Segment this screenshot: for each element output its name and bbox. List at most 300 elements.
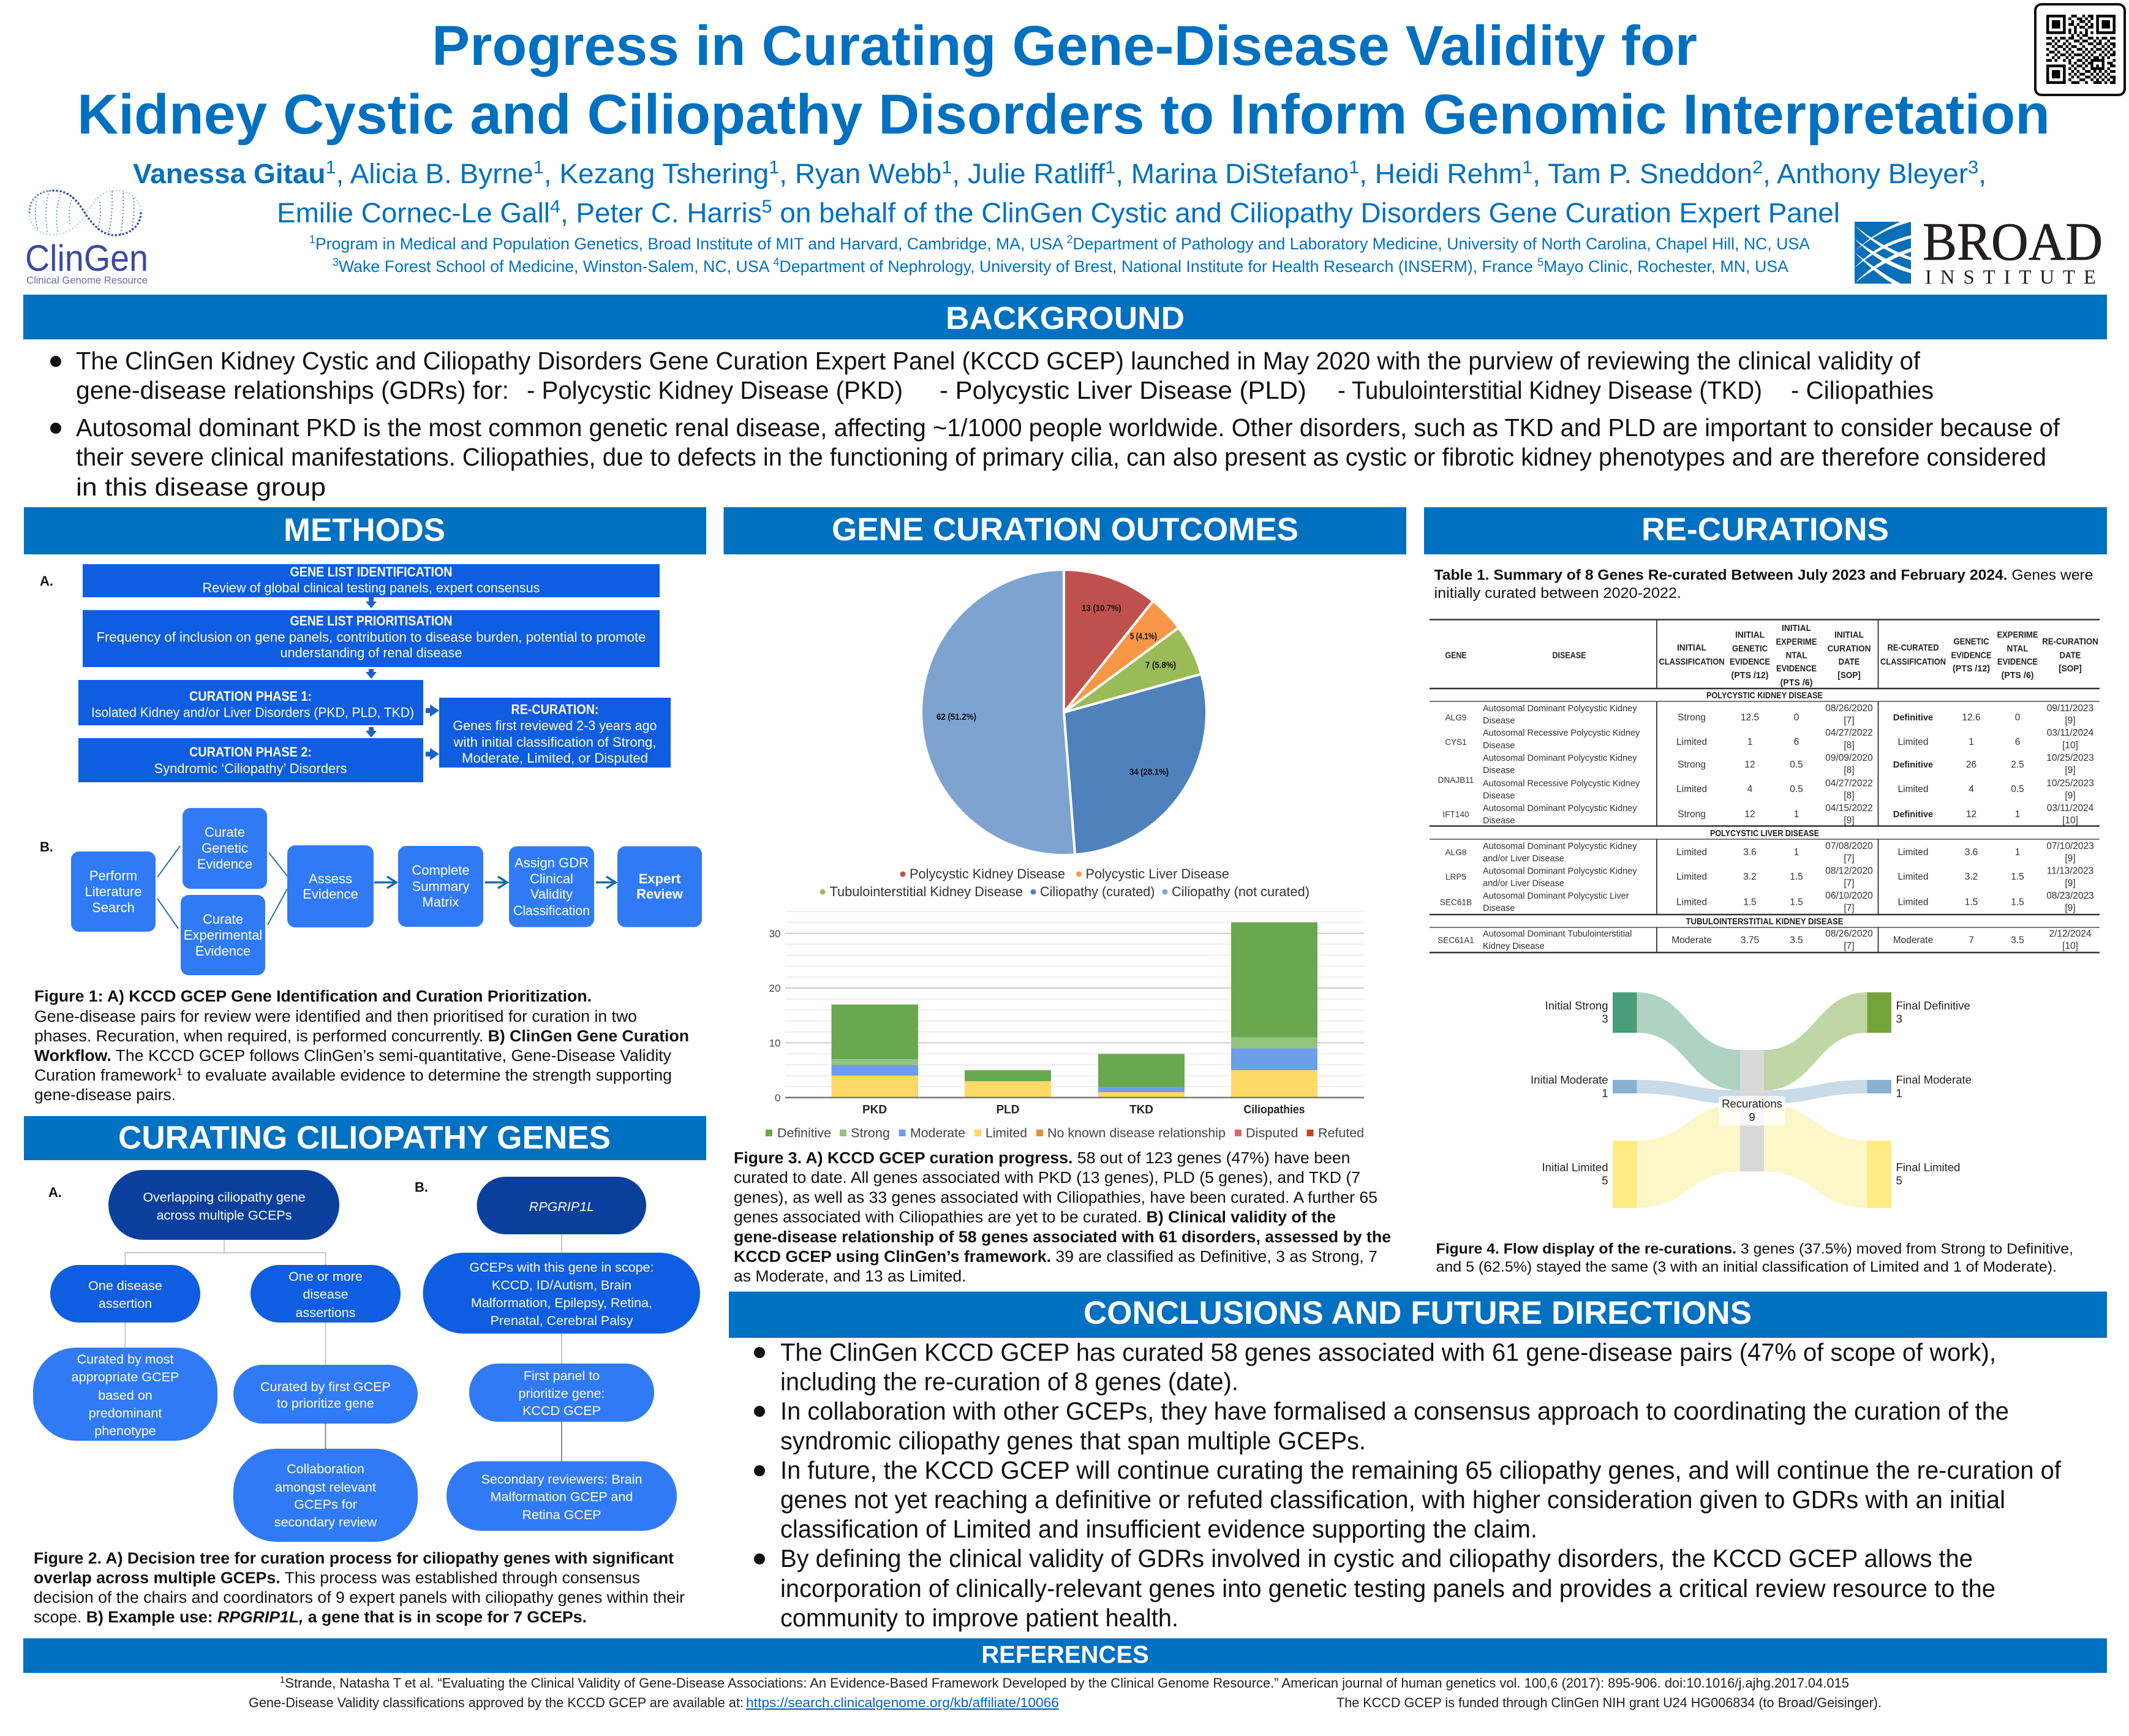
helix icon bbox=[29, 191, 141, 235]
box: assign classification: Classification bbox=[513, 903, 590, 918]
heading: conclusions bbox=[729, 1291, 2107, 1338]
caption: figure 3: as Moderate, and 13 as Limited. bbox=[734, 1268, 967, 1285]
section: polycystic liver disease: 08/23/2023 bbox=[2046, 891, 2094, 901]
table header: INITIAL bbox=[1782, 623, 1811, 633]
section: polycystic liver disease: ALG8 bbox=[1445, 848, 1466, 857]
section: polycystic kidney disease: Definitive bbox=[1893, 713, 1933, 723]
section: polycystic kidney disease: 12 bbox=[1966, 809, 1976, 820]
pill: one disease assertion: assertion bbox=[99, 1296, 152, 1311]
box: gene list identification: GENE LIST IDENTIFICATION bbox=[290, 564, 452, 579]
caption: figure 2 bbox=[34, 1550, 685, 1626]
broad icon bbox=[1855, 222, 1911, 284]
node labels: Final Limited bbox=[1896, 1161, 1960, 1174]
pie legend: Polycystic Kidney Disease bbox=[910, 866, 1065, 881]
text block: background bullets: - Polycystic Liver Disease (PLD) bbox=[940, 376, 1306, 404]
pill: one or more disease assertions: assertions bbox=[295, 1305, 355, 1320]
flowchart A: gene prioritisation bbox=[40, 564, 671, 782]
table header: NTAL bbox=[2007, 643, 2029, 654]
table header: (PTS /12) bbox=[1953, 663, 1990, 674]
box: curate experimental evidence: Curate bbox=[203, 911, 243, 927]
section: polycystic kidney disease: 6 bbox=[2015, 737, 2020, 747]
text block: background bullets bbox=[50, 347, 2060, 501]
caption: figure 3: gene-disease relationship of 58 genes associated with 61 disorders, assessed by the bbox=[734, 1229, 1391, 1246]
pill: secondary reviewers: Malformation GCEP and bbox=[491, 1490, 633, 1504]
connector lines bbox=[125, 1240, 326, 1365]
table header: (PTS /12) bbox=[1731, 670, 1769, 681]
section: polycystic liver disease: Limited bbox=[1676, 847, 1707, 858]
pill: curated by first GCEP: Curated by first GCEP bbox=[260, 1379, 391, 1394]
section: tubulointerstitial kidney disease: Moderate bbox=[1671, 935, 1712, 946]
pill: curated by most appropriate GCEP: predominant bbox=[89, 1406, 162, 1421]
decision tree A bbox=[33, 1170, 418, 1542]
box: gene list identification: Review of global clinical testing panels, expert consensus bbox=[202, 580, 540, 595]
caption: figure 1: gene-disease pairs. bbox=[34, 1087, 176, 1104]
pill: overlapping ciliopathy gene bbox=[108, 1170, 339, 1240]
section: polycystic liver disease: [7] bbox=[1844, 903, 1855, 913]
caption: figure 4: and 5 (62.5%) stayed the same (3 with an initial classification of Limited and 1 of Moderate). bbox=[1436, 1259, 2057, 1275]
section: polycystic liver disease: [9] bbox=[2065, 903, 2076, 913]
pill: RPGRIP1L bbox=[477, 1177, 646, 1234]
section: polycystic kidney disease: 12.6 bbox=[1962, 712, 1981, 723]
bar legend: Definitive bbox=[777, 1126, 831, 1141]
flowchart B: curation workflow bbox=[40, 808, 702, 975]
section: polycystic kidney disease: Limited bbox=[1676, 784, 1707, 794]
box: perform literature search: Search bbox=[92, 900, 135, 915]
node labels: 1 bbox=[1602, 1087, 1608, 1100]
section: polycystic kidney disease: [7] bbox=[1844, 715, 1855, 726]
bar chart bbox=[769, 911, 1364, 1116]
text block: references: https://search.clinicalgenome.org/kb/affiliate/10066 bbox=[746, 1695, 1059, 1710]
section: polycystic liver disease: 1 bbox=[2015, 847, 2020, 858]
section: polycystic liver disease: 06/10/2020 bbox=[1825, 891, 1873, 901]
center label: recurations bbox=[1719, 1096, 1785, 1126]
section: polycystic kidney disease: 0.5 bbox=[1790, 784, 1803, 794]
pill: curated by first GCEP bbox=[233, 1365, 418, 1424]
bar chart: 0 bbox=[775, 1092, 780, 1104]
pill: one or more disease assertions: disease bbox=[303, 1287, 349, 1302]
box: curate genetic evidence: Evidence bbox=[197, 856, 252, 872]
caption: table 1: Table 1. Summary of 8 Genes Re-curated Between July 2023 and February 2024. Genes were bbox=[1434, 567, 2093, 583]
panel: gene curation outcomes bbox=[724, 507, 1406, 1285]
text block: background bullets: - Polycystic Kidney Disease (PKD) bbox=[527, 376, 903, 404]
pill: secondary reviewers: Retina GCEP bbox=[522, 1508, 601, 1522]
section: polycystic kidney disease: Disease bbox=[1483, 716, 1515, 726]
section: polycystic kidney disease: 04/27/2022 bbox=[1825, 728, 1873, 738]
table: re-curated genes bbox=[1430, 620, 2100, 953]
box: assess evidence: Evidence bbox=[303, 886, 358, 902]
section: polycystic liver disease: Autosomal Dominant Polycystic Liver bbox=[1483, 891, 1629, 901]
caption: figure 3: KCCD GCEP using ClinGen’s framework. 39 are classified as Definitive, 3 as Strong, 7 bbox=[734, 1248, 1377, 1266]
section: polycystic kidney disease: 6 bbox=[1794, 737, 1799, 747]
box: curate genetic evidence: Curate bbox=[205, 825, 245, 840]
pill: curated by most appropriate GCEP: Curated by most bbox=[77, 1352, 173, 1367]
section: polycystic kidney disease: Autosomal Recessive Polycystic Kidney bbox=[1483, 728, 1640, 738]
pill: first panel: First panel to bbox=[524, 1368, 600, 1383]
pill: GCEPs with this gene in scope: KCCD, ID/Autism, Brain bbox=[492, 1278, 631, 1293]
pill: curated by most appropriate GCEP: appropriate GCEP bbox=[72, 1370, 179, 1384]
bar legend: Moderate bbox=[910, 1126, 965, 1141]
bar legend: Refuted bbox=[1318, 1126, 1364, 1141]
bar chart: 20 bbox=[769, 983, 780, 994]
table header: INITIAL bbox=[1834, 630, 1864, 640]
pill: RPGRIP1L: RPGRIP1L bbox=[529, 1199, 594, 1214]
heading: curating ciliopathy genes: CURATING CILIOPATHY GENES bbox=[118, 1120, 611, 1156]
title bbox=[77, 15, 2050, 146]
section: polycystic kidney disease: 4 bbox=[1969, 784, 1974, 794]
section: polycystic kidney disease: [10] bbox=[2062, 740, 2078, 751]
section: polycystic kidney disease: 08/26/2020 bbox=[1825, 703, 1873, 714]
section: polycystic kidney disease: Disease bbox=[1483, 741, 1515, 751]
section: polycystic kidney disease: Limited bbox=[1676, 737, 1707, 747]
box: perform literature search bbox=[71, 851, 156, 932]
caption: figure 4 bbox=[1436, 1241, 2073, 1275]
text block: background bullets: - Ciliopathies bbox=[1791, 376, 1934, 404]
box: gene list prioritisation: understanding of renal disease bbox=[281, 645, 462, 660]
caption: figure 1: Figure 1: A) KCCD GCEP Gene Identification and Curation Prioritization. bbox=[34, 988, 592, 1005]
pie chart: 34 (28.1%) bbox=[1129, 767, 1169, 777]
table header: EVIDENCE bbox=[1776, 663, 1817, 674]
decision tree B: RPGRIP1L example: B. bbox=[415, 1180, 428, 1194]
pill: one or more disease assertions: One or more bbox=[288, 1269, 363, 1284]
pill: collaboration bbox=[233, 1449, 418, 1542]
section: polycystic kidney disease: 0 bbox=[1794, 712, 1799, 723]
section: polycystic kidney disease: 10/25/2023 bbox=[2046, 753, 2094, 763]
section: polycystic kidney disease: Disease bbox=[1483, 766, 1515, 776]
text block: conclusion bullets: community to improve patient health. bbox=[780, 1604, 1178, 1632]
logo: QR code bbox=[2035, 4, 2125, 95]
text block: conclusion bullets: incorporation of clinically-relevant genes into genetic testing panels and provides a critical review resource to the bbox=[780, 1574, 1995, 1602]
pie legend: Ciliopathy (not curated) bbox=[1172, 884, 1309, 899]
pie chart: 7 (5.8%) bbox=[1145, 660, 1176, 670]
pill: curated by most appropriate GCEP: phenotype bbox=[94, 1424, 156, 1438]
title: Progress in Curating Gene-Disease Validity for bbox=[432, 15, 1697, 77]
pill: collaboration: secondary review bbox=[274, 1515, 377, 1530]
section: polycystic kidney disease bbox=[1438, 690, 2094, 826]
pill: one or more disease assertions bbox=[251, 1265, 401, 1323]
section: polycystic kidney disease: [10] bbox=[2062, 815, 2078, 826]
panel: curating ciliopathy genes bbox=[24, 1116, 706, 1626]
bar chart: Ciliopathies bbox=[1243, 1104, 1305, 1116]
bar chart: PKD bbox=[862, 1104, 887, 1116]
box: expert review: Expert bbox=[639, 871, 681, 886]
box: re-curation: RE-CURATION: bbox=[511, 702, 599, 717]
heading: re-curations bbox=[1424, 507, 2107, 554]
pill: GCEPs with this gene in scope: GCEPs with this gene in scope: bbox=[469, 1260, 654, 1275]
section: polycystic kidney disease: IFT140 bbox=[1442, 810, 1469, 819]
box: assign classification: Clinical bbox=[530, 871, 573, 886]
section: polycystic kidney disease: 03/11/2024 bbox=[2047, 803, 2094, 813]
box: gene list prioritisation: Frequency of inclusion on gene panels, contribution to disease burden, potential to promote bbox=[97, 630, 646, 644]
logo: ClinGen: ClinGen bbox=[25, 238, 148, 279]
affiliations: 1Program in Medical and Population Genetics, Broad Institute of MIT and Harvard, Cambridge, MA, USA 2Department of Pathology and Laboratory Medicine, University of North Carolina, Chapel Hill, NC, USA bbox=[309, 233, 1810, 253]
text block: conclusion bullets: syndromic ciliopathy genes that span multiple GCEPs. bbox=[780, 1427, 1366, 1455]
text block: background bullets: their severe clinical manifestations. Ciliopathies, due to defects in the functioning of primary cilia, can also present as cystic or fibrotic kidney phenotypes and are therefore considered bbox=[76, 443, 2046, 471]
header: title, authors and affiliations bbox=[77, 15, 2050, 276]
section: polycystic kidney disease: 12 bbox=[1744, 809, 1755, 820]
caption: figure 2: Figure 2. A) Decision tree for curation process for ciliopathy genes with significant bbox=[34, 1550, 674, 1567]
bar chart: PLD bbox=[996, 1104, 1019, 1116]
section: polycystic liver disease: 08/12/2020 bbox=[1825, 866, 1873, 876]
section: polycystic liver disease: POLYCYSTIC LIVER DISEASE bbox=[1710, 828, 1819, 839]
section: tubulointerstitial kidney disease: 3.5 bbox=[2011, 935, 2024, 946]
section: polycystic liver disease: 3.6 bbox=[1965, 847, 1978, 858]
section: polycystic kidney disease: CYS1 bbox=[1445, 738, 1467, 747]
section: polycystic kidney disease: Autosomal Dominant Polycystic Kidney bbox=[1483, 753, 1637, 763]
pill: overlapping ciliopathy gene: across multiple GCEPs bbox=[156, 1208, 292, 1223]
section: polycystic kidney disease: 12.5 bbox=[1741, 712, 1759, 723]
section: polycystic liver disease: 07/10/2023 bbox=[2046, 841, 2094, 851]
table header: GENETIC bbox=[1954, 636, 1989, 647]
pill: curated by most appropriate GCEP: based on bbox=[98, 1388, 153, 1403]
section: polycystic liver disease: 1.5 bbox=[1790, 897, 1803, 908]
section: polycystic kidney disease: [9] bbox=[1844, 815, 1855, 826]
section: polycystic liver disease: Limited bbox=[1676, 897, 1707, 908]
section: polycystic liver disease bbox=[1440, 828, 2094, 913]
box: curation phase 1 bbox=[78, 680, 423, 725]
text block: references: The KCCD GCEP is funded through ClinGen NIH grant U24 HG006834 (to Broad/Geisinger). bbox=[1336, 1695, 1882, 1710]
affiliations: 3Wake Forest School of Medicine, Winston-Salem, NC, USA 4Department of Nephrology, University of Brest, National Institute for Health Research (INSERM), France 5Mayo Clinic, Rochester, MN, USA bbox=[333, 256, 1788, 276]
pill: collaboration: Collaboration bbox=[287, 1462, 364, 1476]
box: curate genetic evidence bbox=[183, 808, 267, 889]
text block: conclusion bullets bbox=[754, 1338, 2062, 1632]
section: polycystic liver disease: Limited bbox=[1898, 847, 1928, 858]
text block: references: Gene-Disease Validity classifications approved by the KCCD GCEP are available at: bbox=[249, 1695, 744, 1710]
box: perform literature search: Literature bbox=[85, 884, 141, 899]
caption: figure 1: Gene-disease pairs for review were identified and then prioritised for curation in two bbox=[34, 1008, 637, 1025]
affiliations bbox=[309, 233, 1810, 276]
section: polycystic kidney disease: 1 bbox=[1747, 737, 1752, 747]
section: polycystic liver disease: LRP5 bbox=[1445, 872, 1466, 881]
text block: background bullets: The ClinGen Kidney Cystic and Ciliopathy Disorders Gene Curation Expert Panel (KCCD GCEP) launched in May 2020 with the purview of reviewing the clinical validity of bbox=[76, 347, 1921, 375]
logo: ClinGen: Clinical Genome Resource bbox=[26, 274, 148, 286]
pill: secondary reviewers bbox=[447, 1462, 677, 1531]
pill: collaboration: GCEPs for bbox=[294, 1497, 357, 1512]
arrow: right bbox=[374, 877, 396, 888]
heading: conclusions: CONCLUSIONS AND FUTURE DIRECTIONS bbox=[1083, 1295, 1752, 1331]
logo: Broad Institute: INSTITUTE bbox=[1925, 266, 2096, 289]
heading: methods bbox=[24, 507, 706, 554]
section: polycystic liver disease: and/or Liver Disease bbox=[1483, 878, 1564, 888]
node labels: 3 bbox=[1896, 1012, 1902, 1025]
bar legend bbox=[766, 1126, 1364, 1141]
section: polycystic kidney disease: 09/11/2023 bbox=[2047, 703, 2093, 714]
section: polycystic kidney disease: 09/09/2020 bbox=[1825, 753, 1873, 763]
section: polycystic liver disease: Limited bbox=[1898, 872, 1928, 882]
section: polycystic kidney disease: POLYCYSTIC KIDNEY DISEASE bbox=[1706, 690, 1823, 701]
box: gene list prioritisation bbox=[83, 610, 660, 667]
arrow: right bbox=[596, 877, 616, 888]
caption: figure 2: decision of the chairs and coordinators of 9 expert panels with ciliopathy genes within their bbox=[34, 1589, 685, 1606]
section: polycystic kidney disease: 1 bbox=[2015, 809, 2020, 820]
section: polycystic kidney disease: [8] bbox=[1844, 740, 1855, 751]
bar legend: Disputed bbox=[1246, 1126, 1298, 1141]
section: tubulointerstitial kidney disease: [10] bbox=[2062, 941, 2078, 951]
section: polycystic kidney disease: Definitive bbox=[1893, 810, 1933, 820]
caption: figure 3: genes associated with Ciliopathies are yet to be curated. B) Clinical validity of the bbox=[734, 1209, 1336, 1226]
pie legend: Polycystic Liver Disease bbox=[1085, 866, 1229, 881]
arrow: right bbox=[426, 704, 439, 717]
section: polycystic liver disease: [7] bbox=[1844, 878, 1855, 888]
pie chart: 62 (51.2%) bbox=[936, 712, 976, 722]
box: curation phase 2 bbox=[78, 738, 423, 782]
box: curation phase 1: Isolated Kidney and/or Liver Disorders (PKD, PLD, TKD) bbox=[91, 704, 414, 720]
pill: first panel bbox=[469, 1364, 654, 1422]
caption: figure 4: Figure 4. Flow display of the re-curations. 3 genes (37.5%) moved from Strong to Definitive, bbox=[1436, 1241, 2073, 1257]
section: polycystic liver disease: 1 bbox=[1794, 847, 1799, 858]
caption: figure 1: Curation framework 1 to evaluate available evidence to determine the strength supporting bbox=[34, 1066, 672, 1084]
section: polycystic liver disease: Limited bbox=[1676, 872, 1707, 882]
bar legend: Strong bbox=[851, 1126, 890, 1141]
box: curation phase 2: Syndromic ‘Ciliopathy’ Disorders bbox=[154, 761, 347, 776]
box: complete summary matrix: Matrix bbox=[423, 894, 459, 910]
section: polycystic kidney disease: Strong bbox=[1678, 712, 1706, 723]
section: polycystic liver disease: Autosomal Dominant Polycystic Kidney bbox=[1483, 866, 1637, 876]
authors bbox=[133, 157, 1986, 228]
table header: EVIDENCE bbox=[1997, 657, 2038, 667]
text block: background bullets: - Tubulointerstitial Kidney Disease (TKD) bbox=[1338, 376, 1762, 404]
text block: background bullets: in this disease group bbox=[76, 473, 326, 501]
panel: background bbox=[23, 295, 2107, 501]
box: curate experimental evidence bbox=[181, 895, 265, 975]
box: curation phase 1: CURATION PHASE 1: bbox=[189, 689, 312, 704]
text block: background bullets: Autosomal dominant PKD is the most common genetic renal disease, affecting ~1/1000 people worldwide. Other disorders, such as TKD and PLD are important to consider because of bbox=[76, 413, 2060, 442]
section: polycystic liver disease: 1.5 bbox=[2011, 897, 2024, 908]
pie chart bbox=[921, 570, 1207, 855]
text block: conclusion bullets: including the re-curation of 8 genes (date). bbox=[780, 1367, 1238, 1395]
box: curate genetic evidence: Genetic bbox=[202, 840, 248, 856]
section: tubulointerstitial kidney disease: Autosomal Dominant Tubulointerstitial bbox=[1483, 929, 1632, 939]
heading: references bbox=[23, 1638, 2107, 1673]
pie legend: Ciliopathy (curated) bbox=[1040, 884, 1155, 899]
panel: conclusions and future directions bbox=[729, 1291, 2107, 1632]
arrow: right bbox=[485, 877, 507, 888]
section: polycystic kidney disease: 0.5 bbox=[1790, 760, 1803, 770]
section: polycystic kidney disease: 0 bbox=[2015, 712, 2021, 723]
section: polycystic kidney disease: Strong bbox=[1678, 760, 1706, 770]
box: expert review bbox=[617, 847, 702, 927]
section: tubulointerstitial kidney disease: TUBULOINTERSTITIAL KIDNEY DISEASE bbox=[1686, 916, 1844, 927]
box: assign classification bbox=[509, 847, 594, 927]
table header: INITIAL bbox=[1735, 630, 1765, 640]
box: complete summary matrix bbox=[398, 846, 483, 927]
table header: (PTS /6) bbox=[2002, 670, 2034, 681]
table header: CURATION bbox=[1828, 643, 1871, 654]
section: polycystic kidney disease: 26 bbox=[1966, 760, 1976, 770]
box: gene list identification bbox=[83, 564, 660, 597]
box: re-curation bbox=[439, 698, 671, 768]
section: tubulointerstitial kidney disease: SEC61A1 bbox=[1438, 936, 1474, 945]
bars: PKD bbox=[832, 1005, 918, 1098]
section: polycystic liver disease: [7] bbox=[1844, 853, 1855, 864]
caption: figure 3 bbox=[734, 1150, 1391, 1285]
caption: figure 2: scope. B) Example use: RPGRIP1L, a gene that is in scope for 7 GCEPs. bbox=[34, 1609, 587, 1626]
section: polycystic kidney disease: Disease bbox=[1483, 816, 1515, 826]
section: polycystic kidney disease: 10/25/2023 bbox=[2046, 778, 2094, 789]
bar chart: TKD bbox=[1129, 1104, 1153, 1116]
section: polycystic liver disease: 07/08/2020 bbox=[1825, 841, 1873, 851]
section: polycystic kidney disease: Strong bbox=[1678, 809, 1706, 820]
section: tubulointerstitial kidney disease: 3.75 bbox=[1741, 935, 1759, 946]
heading: gene curation outcomes bbox=[724, 507, 1406, 554]
bars: PLD bbox=[965, 1070, 1051, 1098]
section: polycystic kidney disease: Autosomal Dominant Polycystic Kidney bbox=[1483, 704, 1637, 714]
flows bbox=[1637, 992, 1867, 1208]
section: tubulointerstitial kidney disease bbox=[1438, 916, 2092, 951]
node labels: Initial Strong bbox=[1545, 999, 1608, 1012]
box: assign classification: Assign GDR bbox=[514, 855, 589, 870]
node labels: 3 bbox=[1602, 1012, 1608, 1025]
table header: EXPERIME bbox=[1776, 637, 1817, 647]
decision tree B: RPGRIP1L example bbox=[415, 1177, 700, 1531]
section: polycystic kidney disease: [8] bbox=[1844, 765, 1855, 776]
node labels: Final Definitive bbox=[1896, 999, 1970, 1012]
arrow: down bbox=[366, 727, 377, 738]
section: polycystic liver disease: Disease bbox=[1483, 904, 1515, 913]
section: tubulointerstitial kidney disease: 2/12/2024 bbox=[2049, 929, 2092, 939]
pie chart: 5 (4.1%) bbox=[1130, 631, 1157, 642]
pill: one disease assertion bbox=[50, 1265, 200, 1323]
pill: GCEPs with this gene in scope bbox=[423, 1253, 700, 1334]
box: curation phase 2: CURATION PHASE 2: bbox=[189, 744, 312, 760]
section: polycystic kidney disease: Definitive bbox=[1893, 760, 1933, 770]
text block: conclusion bullets: In collaboration with other GCEPs, they have formalised a consensus approach to coordinating the curation of the bbox=[780, 1397, 2009, 1425]
section: polycystic kidney disease: [8] bbox=[1844, 790, 1855, 801]
table header: DISEASE bbox=[1552, 651, 1586, 660]
section: polycystic liver disease: and/or Liver Disease bbox=[1483, 854, 1564, 864]
table header: (PTS /6) bbox=[1780, 677, 1813, 688]
connector lines bbox=[157, 846, 287, 929]
connector lines bbox=[561, 1234, 562, 1364]
bar chart: 30 bbox=[769, 928, 780, 940]
section: polycystic liver disease: 3.6 bbox=[1743, 847, 1757, 858]
pill: GCEPs with this gene in scope: Prenatal, Cerebral Palsy bbox=[490, 1313, 633, 1328]
table header bbox=[1445, 623, 2098, 688]
pill: first panel: KCCD GCEP bbox=[522, 1403, 601, 1418]
section: polycystic liver disease: 1.5 bbox=[1965, 897, 1978, 908]
pill: overlapping ciliopathy gene: Overlapping ciliopathy gene bbox=[143, 1190, 306, 1204]
pie chart: 13 (10.7%) bbox=[1082, 603, 1121, 614]
section: polycystic kidney disease: 2.5 bbox=[2011, 760, 2024, 770]
section: polycystic liver disease: Limited bbox=[1898, 897, 1928, 908]
arrow: down bbox=[366, 669, 377, 679]
section: polycystic kidney disease: 04/27/2022 bbox=[1825, 778, 1873, 789]
heading: background bbox=[23, 295, 2107, 339]
section: polycystic liver disease: 3.2 bbox=[1965, 872, 1978, 882]
caption: figure 1: phases. Recuration, when required, is performed concurrently. B) ClinGen Gene Curation bbox=[34, 1028, 689, 1045]
box: complete summary matrix: Complete bbox=[412, 862, 470, 878]
sankey diagram: flow of re-curations bbox=[1531, 992, 1972, 1208]
caption: table 1: initially curated between 2020-2022. bbox=[1434, 585, 1681, 602]
section: polycystic kidney disease: [9] bbox=[2065, 790, 2076, 801]
section: polycystic liver disease: 1.5 bbox=[2011, 872, 2024, 882]
heading: references: REFERENCES bbox=[981, 1642, 1149, 1669]
section: tubulointerstitial kidney disease: 7 bbox=[1969, 935, 1974, 946]
box: re-curation: with initial classification of Strong, bbox=[453, 734, 657, 750]
node labels: Final Moderate bbox=[1896, 1073, 1972, 1086]
table header: RE-CURATED bbox=[1888, 643, 1939, 653]
node labels: Initial Moderate bbox=[1531, 1073, 1608, 1086]
section: tubulointerstitial kidney disease: Moderate bbox=[1893, 935, 1933, 946]
table header: INITIAL bbox=[1677, 643, 1706, 653]
table header: RE-CURATION bbox=[2042, 636, 2098, 647]
decision tree A: A. bbox=[48, 1185, 62, 1200]
heading: gene curation outcomes: GENE CURATION OUTCOMES bbox=[832, 511, 1298, 548]
title: Kidney Cystic and Ciliopathy Disorders to Inform Genomic Interpretation bbox=[77, 83, 2050, 146]
panel: re-curations bbox=[1424, 507, 2107, 1275]
section: tubulointerstitial kidney disease: Kidney Disease bbox=[1483, 942, 1545, 951]
caption: figure 3: curated to date. All genes associated with PKD (13 genes), PLD (5 genes), and TKD (7 bbox=[734, 1169, 1360, 1187]
node labels: Initial Limited bbox=[1542, 1161, 1608, 1174]
